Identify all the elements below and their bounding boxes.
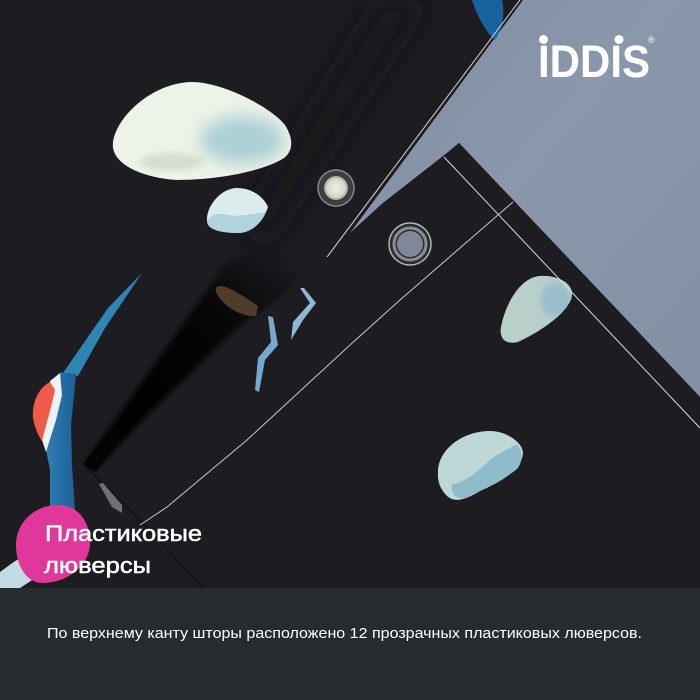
stitching: flap side seam (444, 157, 700, 428)
logo: IDDIS: ® (648, 35, 655, 45)
photo: black shadow band under the fold (84, 235, 340, 470)
bird: white and blue fragment bottom left (0, 558, 40, 588)
stitching: flap long seam (140, 202, 513, 525)
photo: soft fold shading on the upper curtain layer (240, 0, 425, 240)
photo: grey reverse side of curtain (350, 0, 700, 397)
bird: left leg (255, 316, 278, 392)
stone: large pebble (110, 80, 295, 182)
heading: Пластиковые люверсы: Пластиковые (45, 521, 202, 546)
bird: beak (63, 273, 142, 376)
accent: pink blob (16, 505, 90, 583)
stone: right pebble on flap (500, 276, 572, 343)
bird: red crown (33, 382, 55, 441)
photo: faint hem edge of the flap (85, 466, 203, 588)
panel: caption bar (0, 588, 700, 700)
bird: blue plumage at top edge (472, 0, 503, 40)
stone: small pebble (207, 188, 268, 233)
heading: Пластиковые люверсы: люверсы (44, 553, 151, 578)
bird: heron head and neck (33, 273, 142, 510)
photo: black tip of the fold (83, 430, 122, 472)
text: caption: По верхнему канту шторы расположено 12 прозрачных пластиковых люверсов. (47, 626, 642, 642)
stone: lower pebble on flap (438, 431, 523, 500)
stitching: upper layer seam (327, 0, 520, 257)
photo: front curtain flap (96, 143, 700, 588)
bird: right leg (291, 288, 316, 340)
eyelet: lower transparent grommet (389, 223, 431, 265)
heading: Пластиковые люверсы (44, 521, 202, 578)
bird: white cheek (42, 373, 62, 452)
eyelet: upper grommet (318, 170, 354, 206)
bird: brown fragment in fold (216, 286, 258, 316)
eyelet: grommet under the hem (99, 483, 122, 513)
logo: IDDIS: IDDIS (538, 36, 650, 87)
bird: neck (46, 372, 76, 510)
